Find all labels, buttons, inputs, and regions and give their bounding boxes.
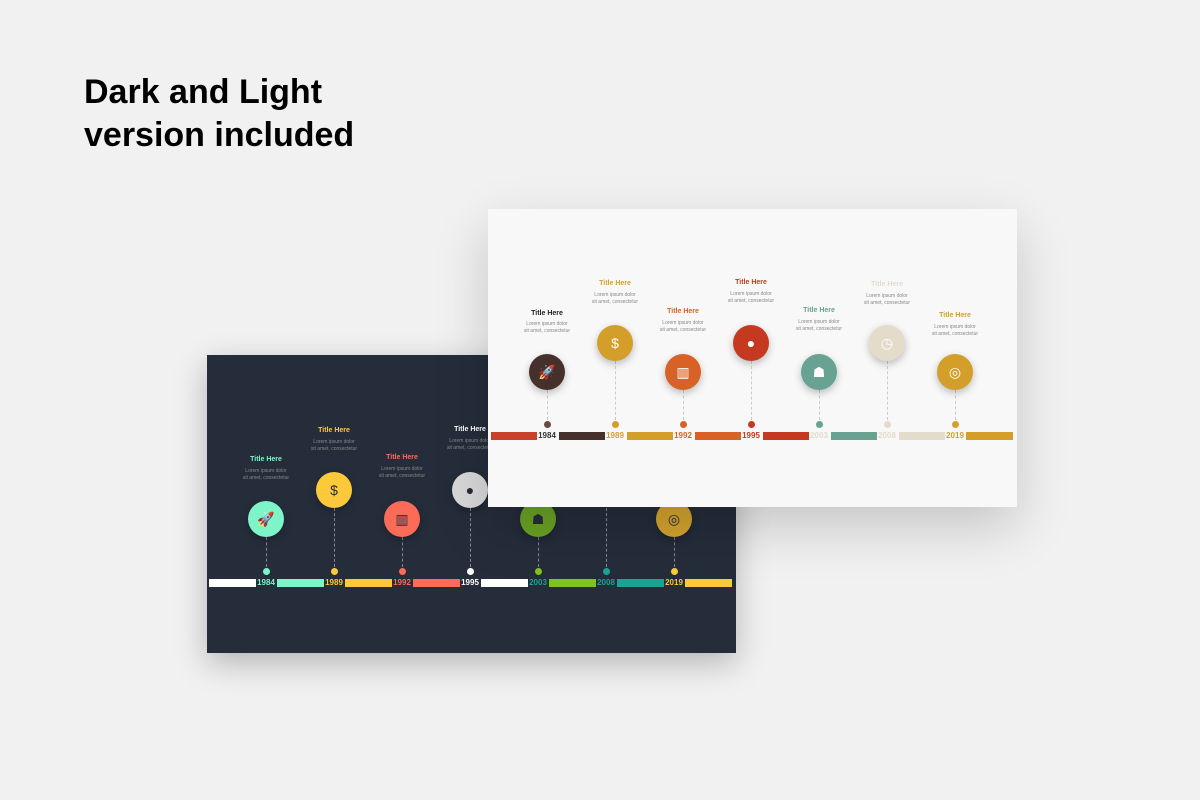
timeline: dark: Lorem ipsum dolor [449,438,491,444]
timeline: light: $ [611,335,619,351]
timeline: light: ◎ [949,364,961,380]
timeline: light: ● [747,335,755,351]
timeline: dark: Title Here [386,454,418,461]
timeline: light: sit amet, consectetur [660,327,706,333]
timeline: dark: ● [466,482,474,498]
timeline: light: Title Here [803,307,835,314]
timeline: light: ◷ [881,334,893,350]
timeline: dark [209,426,732,587]
title: Dark and Light [84,73,322,111]
timeline: dark: Title Here [318,427,350,434]
timeline: light: 1992 [674,431,692,440]
timeline: dark: Lorem ipsum dolor [313,439,355,445]
timeline: light: Lorem ipsum dolor [594,292,636,298]
timeline: light: Title Here [735,279,767,286]
timeline: dark: 1984 [257,578,275,587]
timeline: light: Lorem ipsum dolor [730,291,772,297]
timeline: light: 2019 [946,431,964,440]
timeline: dark: Lorem ipsum dolor [245,468,287,474]
timeline: light: Title Here [667,308,699,315]
timeline: light: ▥ [676,364,690,380]
icon circles: dark: 🚀 [257,510,275,526]
title [84,73,354,154]
timeline: dark: 2003 [529,578,547,587]
timeline: light: Title Here [871,281,903,288]
timeline: light: 1995 [742,431,760,440]
timeline: light: Title Here [531,310,563,317]
timeline: light: ☗ [813,364,825,380]
timeline: light: Lorem ipsum dolor [866,293,908,299]
timeline: light: Lorem ipsum dolor [798,319,840,325]
timeline: dark: Title Here [250,456,282,463]
timeline: dark: ◎ [668,510,680,526]
timeline: light: sit amet, consectetur [592,299,638,305]
timeline: light: sit amet, consectetur [932,331,978,337]
timeline: light: Lorem ipsum dolor [526,321,568,327]
timeline: light: Title Here [599,280,631,287]
timeline: light: 1984 [538,431,556,440]
timeline: dark: $ [330,482,338,498]
timeline: dark: Title Here [454,426,486,433]
timeline: light: sit amet, consectetur [524,328,570,334]
timeline: light: sit amet, consectetur [728,298,774,304]
icon circles: light [529,354,565,390]
timeline: light: 2003 [810,431,828,440]
icon circles: light: 🚀 [538,364,556,380]
icon circles: dark [248,501,284,537]
timeline: dark: 1992 [393,578,411,587]
timeline: dark: 1989 [325,578,343,587]
timeline: dark: sit amet, consectetur [379,473,425,479]
timeline: dark: sit amet, consectetur [311,446,357,452]
timeline: light: sit amet, consectetur [796,326,842,332]
timeline: dark: Lorem ipsum dolor [381,466,423,472]
timeline: dark: 2019 [665,578,683,587]
timeline: dark: 2008 [597,578,615,587]
timeline: dark: sit amet, consectetur [243,475,289,481]
title: version included [84,116,354,154]
timeline: light: Title Here [939,312,971,319]
timeline: dark: 1995 [461,578,479,587]
timeline: light: Lorem ipsum dolor [662,320,704,326]
panel: dark slide [207,355,736,653]
timeline: light: Lorem ipsum dolor [934,324,976,330]
timeline: light: sit amet, consectetur [864,300,910,306]
timeline: light [491,278,1013,440]
timeline: dark: sit amet, consectetur [447,445,493,451]
timeline: light: 2008 [878,431,896,440]
timeline: dark: ☗ [532,510,544,526]
timeline: dark: ▥ [395,510,409,526]
timeline: light: 1989 [606,431,624,440]
panel: light slide [488,209,1017,507]
